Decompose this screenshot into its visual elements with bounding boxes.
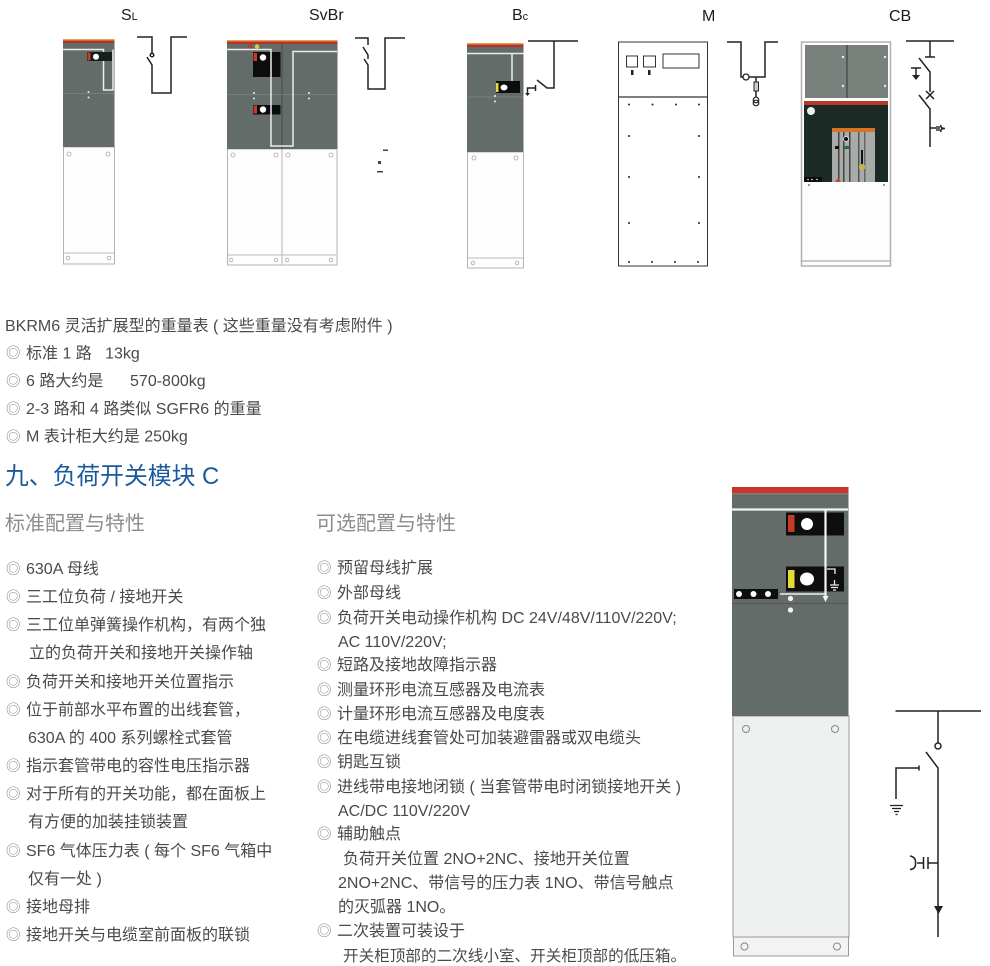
list: standard features: ◎ <box>6 589 20 606</box>
heading: optional: 可选配置与特性 <box>316 512 456 535</box>
list: optional features: 辅助触点 <box>337 825 401 843</box>
list: standard features: 630A 母线 <box>26 560 99 578</box>
list: standard features: ◎ <box>6 674 20 691</box>
list: optional features: 短路及接地故障指示器 <box>337 656 497 674</box>
text block: weight table: 6 路大约是 570-800kg <box>26 372 206 390</box>
list: optional features: 负荷开关位置 2NO+2NC、接地开关位置 <box>343 850 630 868</box>
schematic: SvBr <box>355 38 405 89</box>
list: optional features: 外部母线 <box>337 584 401 602</box>
list: standard features: 负荷开关和接地开关位置指示 <box>26 673 234 691</box>
text block: weight table: BKRM6 灵活扩展型的重量表 ( 这些重量没有考虑附件 ) <box>5 317 393 335</box>
heading: standard: 标准配置与特性 <box>5 512 145 535</box>
text block: weight table: M 表计柜大约是 250kg <box>26 428 188 446</box>
load switch panel <box>786 512 844 536</box>
text block: weight table <box>5 317 393 446</box>
list: optional features: AC 110V/220V; <box>338 634 447 651</box>
list: standard features: 对于所有的开关功能，都在面板上 <box>26 785 266 803</box>
list: standard features: 指示套管带电的容性电压指示器 <box>26 757 250 775</box>
panel: Bc unit <box>467 7 578 268</box>
cabinet: Bc <box>467 43 524 268</box>
list: standard features: ◎ <box>6 927 20 944</box>
schematic: C module <box>890 711 981 937</box>
specks <box>377 150 388 172</box>
label: Bc: Bc <box>512 7 529 24</box>
title: 九、负荷开关模块 C <box>5 463 219 490</box>
list: optional features: AC/DC 110V/220V <box>338 803 471 820</box>
list: optional features: 计量环形电流互感器及电度表 <box>337 705 545 723</box>
panel: M unit <box>618 8 778 266</box>
list: standard features: 接地母排 <box>26 898 90 916</box>
list: optional features: ◎ <box>317 754 332 771</box>
panel: CB unit <box>802 8 954 266</box>
cabinet: CB <box>802 42 890 266</box>
list: standard features: ◎ <box>6 758 20 775</box>
list: optional features: ◎ <box>317 560 332 577</box>
list: optional features: 预留母线扩展 <box>337 559 433 577</box>
label: M: M <box>702 8 715 25</box>
list: optional features: 开关柜顶部的二次线小室、开关柜顶部的低压箱。 <box>343 947 686 965</box>
list: optional features: ◎ <box>317 682 332 699</box>
list: standard features: 仅有一处 ) <box>28 870 102 888</box>
earth switch panel <box>786 566 844 592</box>
list: standard features: ◎ <box>6 899 20 916</box>
list: optional features: ◎ <box>317 585 332 602</box>
text block: weight table: ◎ <box>6 401 20 418</box>
list: optional features: 2NO+2NC、带信号的压力表 1NO、带信号触点 <box>338 874 674 892</box>
text block: weight table: 2-3 路和 4 路类似 SGFR6 的重量 <box>26 400 262 418</box>
list: standard features: 三工位单弹簧操作机构，有两个独 <box>26 615 266 634</box>
list: optional features: ◎ <box>317 657 332 674</box>
text block: weight table: 标准 1 路 13kg <box>26 344 140 362</box>
list: standard features: ◎ <box>6 561 20 578</box>
label: CB: CB <box>889 8 911 25</box>
list: optional features: ◎ <box>317 730 332 747</box>
list: optional features: ◎ <box>317 923 332 940</box>
list: optional features: 的灭弧器 1NO。 <box>338 898 455 916</box>
list: optional features: ◎ <box>317 610 332 627</box>
list: standard features: 三工位负荷 / 接地开关 <box>26 588 183 606</box>
list: standard features: 接地开关与电缆室前面板的联锁 <box>26 926 250 944</box>
list: optional features: 负荷开关电动操作机构 DC 24V/48V/110V/220V; <box>337 609 677 627</box>
text block: weight table: ◎ <box>6 429 20 446</box>
list: optional features: 钥匙互锁 <box>337 753 401 771</box>
list: standard features: 立的负荷开关和接地开关操作轴 <box>29 644 253 662</box>
list: standard features: 有方便的加装挂锁装置 <box>28 813 188 831</box>
list: standard features: ◎ <box>6 843 20 860</box>
cabinet: SL <box>63 39 114 264</box>
list: optional features: ◎ <box>317 826 332 843</box>
list: standard features: ◎ <box>6 617 20 634</box>
list: optional features: 在电缆进线套管处可加装避雷器或双电缆头 <box>337 729 641 747</box>
schematic: SL <box>137 37 187 93</box>
list: standard features: 位于前部水平布置的出线套管， <box>26 701 250 719</box>
list: standard features: SF6 气体压力表 ( 每个 SF6 气箱中 <box>26 842 272 860</box>
panel: SvBr unit <box>227 7 405 265</box>
text block: weight table: ◎ <box>6 373 20 390</box>
list: standard features: 630A 的 400 系列螺栓式套管 <box>28 729 233 747</box>
text block: weight table: ◎ <box>6 345 20 362</box>
schematic: Bc <box>525 41 578 96</box>
schematic: M <box>727 42 778 106</box>
list: optional features: 二次装置可装设于 <box>337 922 465 940</box>
list: standard features: ◎ <box>6 702 20 719</box>
list: optional features <box>317 559 686 965</box>
schematic: CB <box>906 41 954 147</box>
label: SL: SL <box>121 7 138 24</box>
cabinet: M <box>618 42 708 266</box>
panel: C module cabinet <box>732 487 849 956</box>
panel: SL unit <box>63 7 187 264</box>
list: standard features <box>6 560 272 944</box>
label: SvBr: SvBr <box>309 7 344 24</box>
list: standard features: ◎ <box>6 786 20 803</box>
list: optional features: 测量环形电流互感器及电流表 <box>337 681 545 699</box>
list: optional features: ◎ <box>317 779 332 796</box>
indicator strip <box>734 589 778 599</box>
cabinet: SvBr <box>227 40 338 265</box>
list: optional features: 进线带电接地闭锁 ( 当套管带电时闭锁接地开关 ) <box>337 778 681 796</box>
list: optional features: ◎ <box>317 706 332 723</box>
